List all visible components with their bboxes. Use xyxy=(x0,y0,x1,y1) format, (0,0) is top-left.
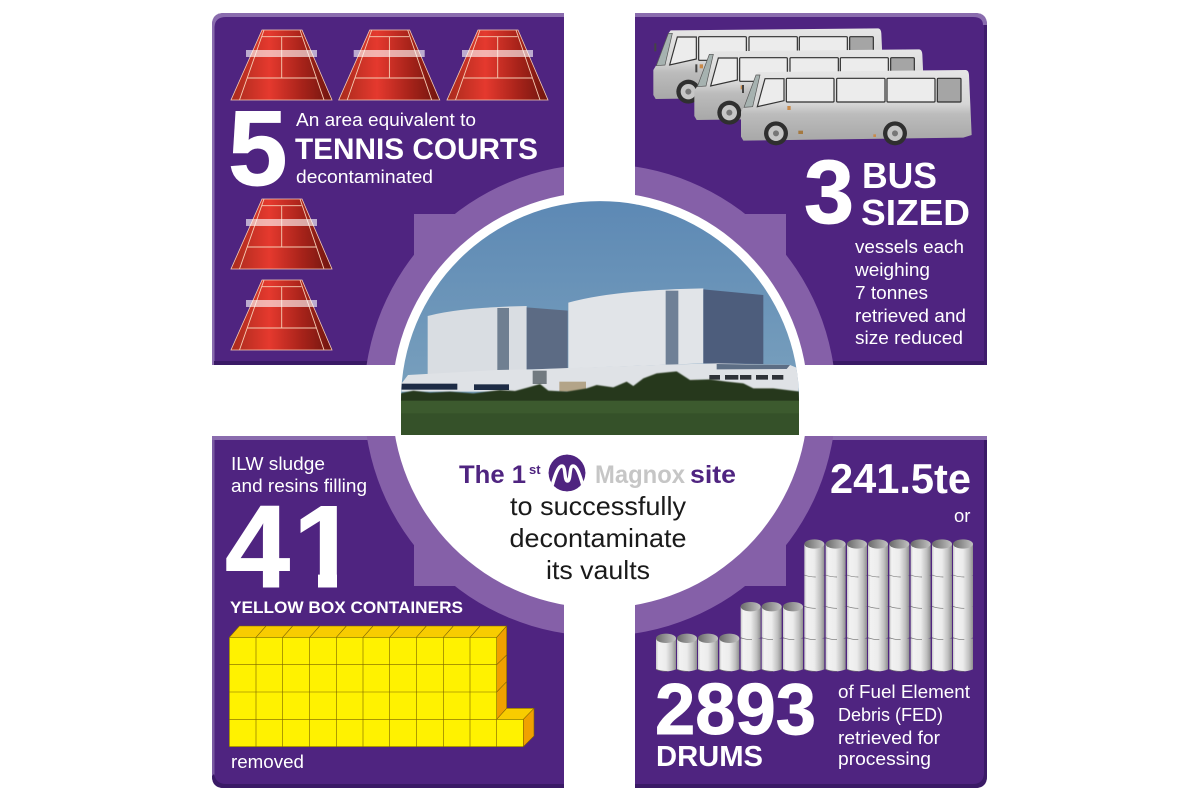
text: vessels description: vessels each xyxy=(855,236,964,257)
text: decontaminated: decontaminated xyxy=(296,166,433,187)
text: fuel element debris xyxy=(838,681,970,769)
text: fuel element debris: of Fuel Element xyxy=(838,681,970,702)
heading: bus: BUS xyxy=(862,155,937,196)
text: vessels description: weighing xyxy=(854,259,930,280)
text: area equivalent: An area equivalent to xyxy=(296,109,476,130)
number: 41: 4 xyxy=(225,481,290,612)
panel: yellow box containers xyxy=(212,436,564,788)
text: to successfully decontaminate its vaults: decontaminate xyxy=(510,523,686,553)
text: vessels description: retrieved and xyxy=(855,305,966,326)
text: to successfully decontaminate its vaults xyxy=(510,491,686,585)
text: fuel element debris: retrieved for xyxy=(838,727,940,748)
chart: stacked drums xyxy=(656,539,973,671)
chart: stacked yellow boxes xyxy=(229,626,534,747)
text: fuel element debris: Debris (FED) xyxy=(838,704,943,725)
heading: the 1st magnox site: site xyxy=(690,461,736,489)
left reactor block xyxy=(428,306,527,375)
text: or: or xyxy=(954,505,970,526)
text: removed: removed xyxy=(231,751,304,772)
number: 5: 5 xyxy=(228,88,288,208)
text: sludge and resins: ILW sludge xyxy=(231,453,325,474)
heading: the 1st magnox site xyxy=(459,454,736,492)
number: 241.5te: 241.5te xyxy=(830,455,971,502)
number: 3: 3 xyxy=(804,143,854,243)
icon: tennis court 2 xyxy=(339,30,440,100)
heading: yellow box containers: YELLOW BOX CONTAINERS xyxy=(230,599,463,617)
heading: the 1st magnox site: The 1 xyxy=(459,461,526,489)
text: vessels description: size reduced xyxy=(855,327,963,348)
text: sludge and resins xyxy=(231,453,367,496)
text: vessels description xyxy=(854,236,966,348)
heading: sized: SIZED xyxy=(861,192,970,233)
right reactor block xyxy=(568,288,703,368)
heading: the 1st magnox site: Magnox xyxy=(595,461,685,489)
text: to successfully decontaminate its vaults: its vaults xyxy=(546,555,650,585)
icon: tennis court 5 xyxy=(231,280,332,350)
panel: bus sized vessels xyxy=(635,13,987,365)
icon: tennis court 4 xyxy=(231,199,332,269)
heading: tennis courts: TENNIS COURTS xyxy=(295,133,538,166)
text: sludge and resins: and resins filling xyxy=(231,475,367,496)
photo: reactor buildings xyxy=(400,195,800,437)
text: vessels description: 7 tonnes xyxy=(855,282,928,303)
panel: fuel element debris drums xyxy=(635,436,987,788)
panel: tennis courts xyxy=(212,13,564,365)
central white circle xyxy=(392,192,808,608)
icon: tennis court 3 xyxy=(447,30,548,100)
text: to successfully decontaminate its vaults: to successfully xyxy=(510,491,686,521)
trees xyxy=(400,371,800,403)
text: fuel element debris: processing xyxy=(838,748,931,769)
heading: drums: DRUMS xyxy=(656,741,763,773)
illustration: three buses xyxy=(653,28,972,145)
number: 2893: 2893 xyxy=(655,670,816,750)
number: 41: 1 xyxy=(293,481,358,612)
base buildings xyxy=(402,363,798,392)
ring: lilac surround xyxy=(364,164,836,636)
field xyxy=(400,401,800,435)
icon: magnox logo xyxy=(548,454,586,492)
heading: the 1st magnox site: st xyxy=(529,462,541,477)
icon: tennis court 1 xyxy=(231,30,332,100)
number: 41 xyxy=(226,506,337,588)
